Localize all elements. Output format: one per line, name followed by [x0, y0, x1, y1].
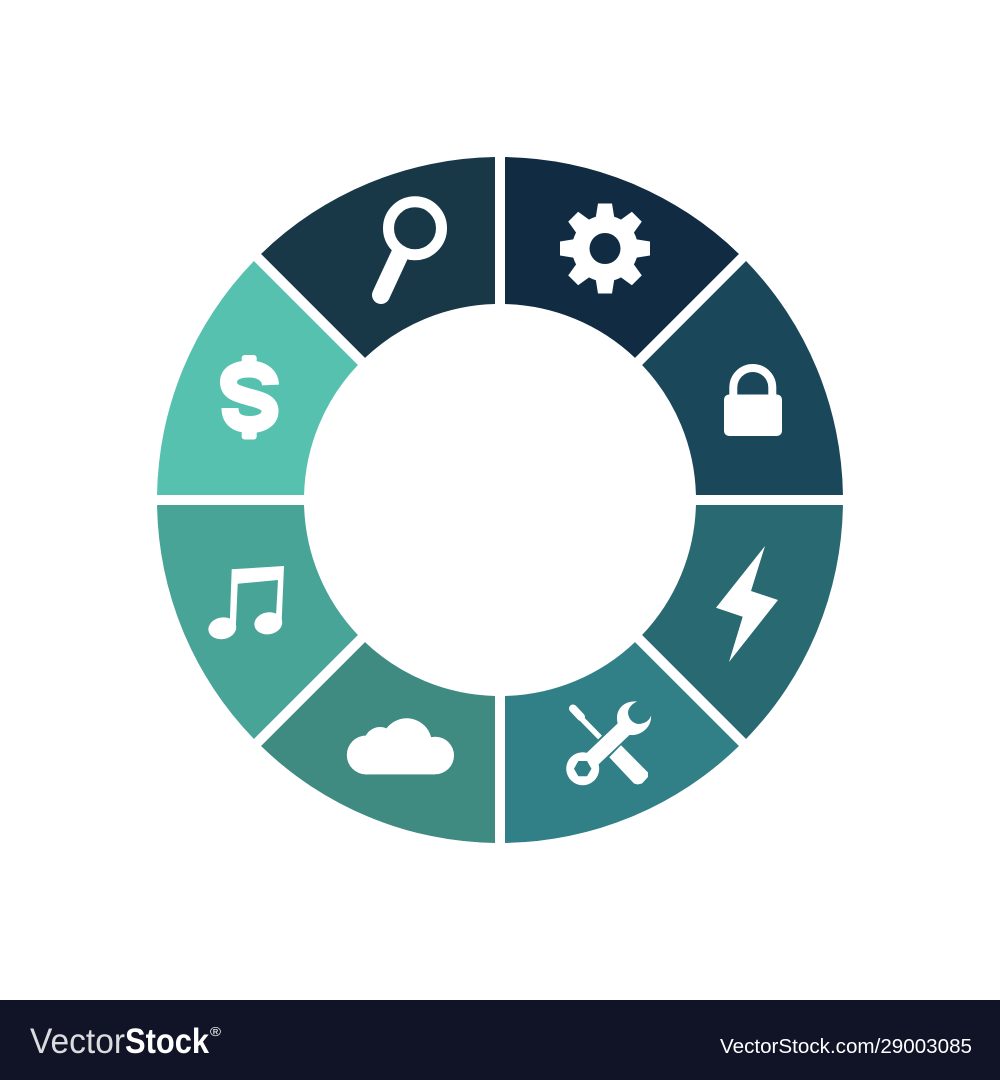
icon: music notes — [207, 566, 284, 641]
segment: gear — [505, 157, 739, 358]
icon: dollar sign — [228, 355, 270, 440]
footer logo: VectorStock: Stock — [125, 1022, 209, 1061]
icon: gear — [560, 204, 650, 294]
segment: search — [261, 157, 495, 358]
footer logo: VectorStock: Vector — [30, 1022, 125, 1061]
segment: dollar — [157, 261, 358, 495]
icon: cloud — [347, 718, 454, 774]
icon: magnifying glass — [381, 202, 442, 295]
panel: eight-segment ring — [157, 157, 843, 843]
footer logo: VectorStock — [30, 1022, 221, 1061]
segment: cloud — [261, 642, 495, 843]
footer logo: VectorStock: ® — [210, 1024, 221, 1039]
segment: music — [157, 505, 358, 739]
footer bar — [0, 1000, 1000, 1080]
segment: lightning — [642, 505, 843, 739]
icon: wrench and screwdriver — [566, 701, 651, 785]
footer image id: VectorStock.com/29003085 — [720, 1036, 972, 1058]
segment: tools — [505, 642, 739, 843]
icon: padlock — [724, 368, 782, 436]
segment: lock — [642, 261, 843, 495]
icon: lightning bolt — [716, 546, 778, 662]
